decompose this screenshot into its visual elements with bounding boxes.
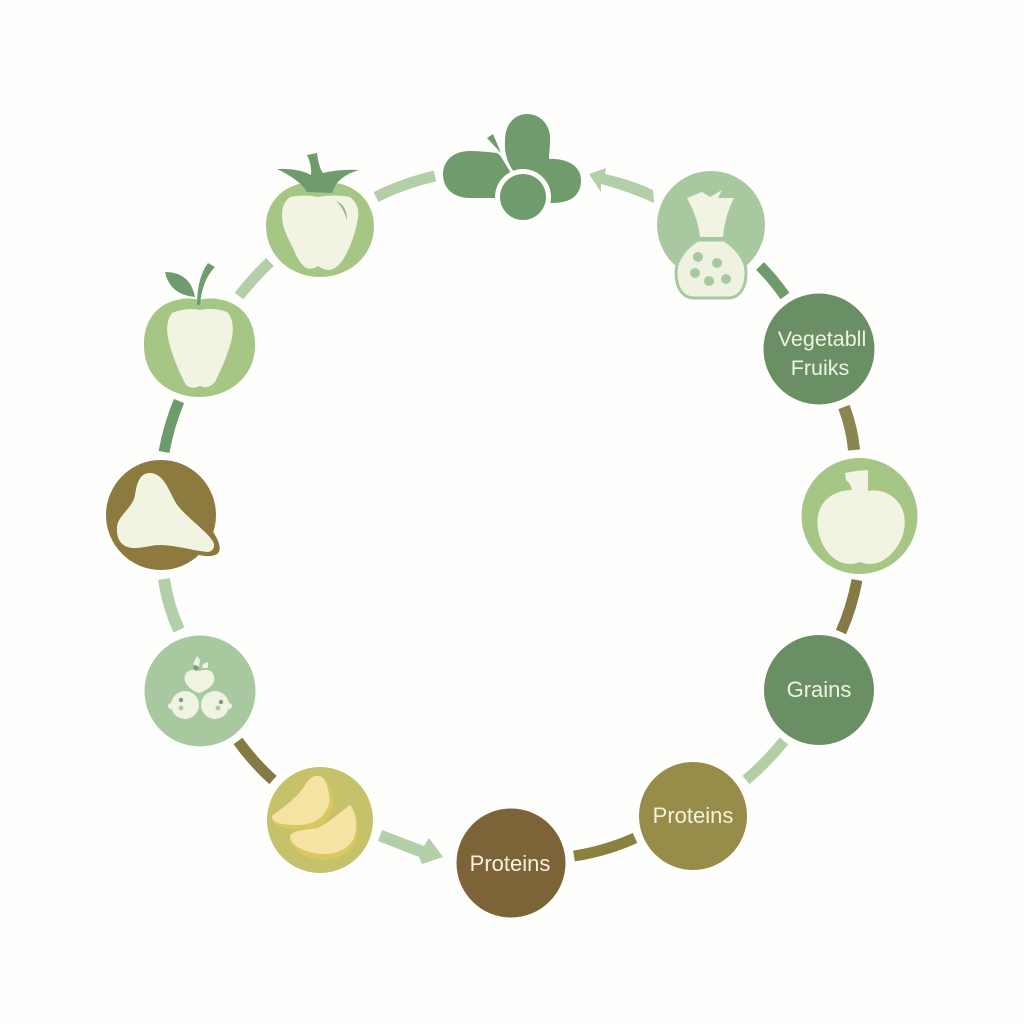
- icon: clover cluster: [443, 114, 581, 225]
- icon: tomato: [266, 153, 374, 277]
- icon: green apple: [802, 458, 918, 574]
- connector: grains to apple: [841, 580, 857, 632]
- node: vegetables and fruits: Fruiks: [791, 356, 849, 380]
- icon: vegetable sack: [657, 171, 765, 298]
- arrow: sack to clover: [589, 168, 654, 203]
- node: vegetables and fruits: Vegetabll: [778, 327, 866, 351]
- node: proteins olive: Proteins: [653, 803, 733, 828]
- connector: pear to apple: [164, 401, 179, 452]
- icon: seeds: [144, 636, 256, 746]
- connector: proteins to grains: [746, 741, 784, 780]
- connector: apple to vegetables: [844, 407, 854, 450]
- connector: proteins to proteins: [574, 838, 635, 856]
- node: proteins brown: [456, 808, 566, 918]
- icon: pear: [106, 460, 220, 570]
- node: proteins olive: [639, 762, 747, 870]
- icon: apple: [144, 263, 255, 397]
- node: vegetables and fruits: [764, 294, 874, 404]
- icon: nuts: [267, 767, 373, 873]
- node: grains: Grains: [787, 677, 851, 702]
- node: grains: [764, 635, 874, 745]
- connector: vegetables to sack: [760, 266, 785, 296]
- arrow: nuts to proteins: [378, 830, 443, 864]
- connector: apple to tomato: [239, 262, 270, 296]
- connector: seeds to pear: [164, 579, 179, 630]
- node: proteins brown: Proteins: [470, 851, 550, 876]
- connector: tomato to clover: [376, 176, 435, 197]
- connector: nuts to seeds: [238, 741, 273, 780]
